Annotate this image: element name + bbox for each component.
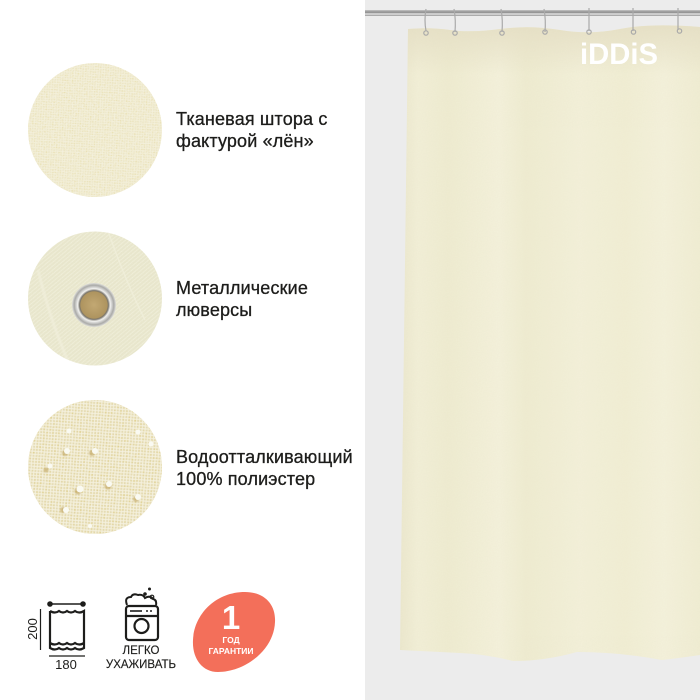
feature text: water repellent: Водоотталкивающий xyxy=(176,447,353,467)
feature text: linen xyxy=(176,109,328,152)
photo: linen texture xyxy=(28,63,162,197)
feature text: eyelets: Металлические xyxy=(176,278,308,298)
curtain rod xyxy=(365,10,700,16)
feature text: eyelets: люверсы xyxy=(176,300,252,320)
care label: ЛЕГКО xyxy=(123,645,159,657)
panel: curtain photo xyxy=(365,0,700,700)
icon: curtain dimensions xyxy=(25,601,86,672)
care label: УХАЖИВАТЬ xyxy=(106,659,176,671)
photo: water drops on fabric xyxy=(28,400,162,534)
feature text: eyelets xyxy=(176,278,308,320)
icon: curtain dimensions: 200 xyxy=(25,618,40,640)
care label xyxy=(106,645,176,671)
feature text: water repellent: 100% полиэстер xyxy=(176,469,315,489)
warranty label xyxy=(208,635,254,656)
photo: metal eyelet xyxy=(28,231,162,366)
icon: washing machine xyxy=(126,588,158,640)
brand logo: iDDiS xyxy=(580,38,658,71)
warranty label: ГАРАНТИИ xyxy=(208,646,254,656)
badge: warranty blob xyxy=(193,592,275,672)
feature text: water repellent xyxy=(176,447,353,490)
feature text: linen: Тканевая штора с xyxy=(176,109,327,129)
warranty number: 1 xyxy=(222,599,240,636)
curtain rings xyxy=(424,8,682,35)
warranty label: ГОД xyxy=(222,635,240,645)
eyelet xyxy=(72,283,116,327)
icon: curtain dimensions: 180 xyxy=(55,657,77,672)
curtain fabric xyxy=(400,25,700,665)
feature text: linen: фактурой «лён» xyxy=(176,131,314,151)
